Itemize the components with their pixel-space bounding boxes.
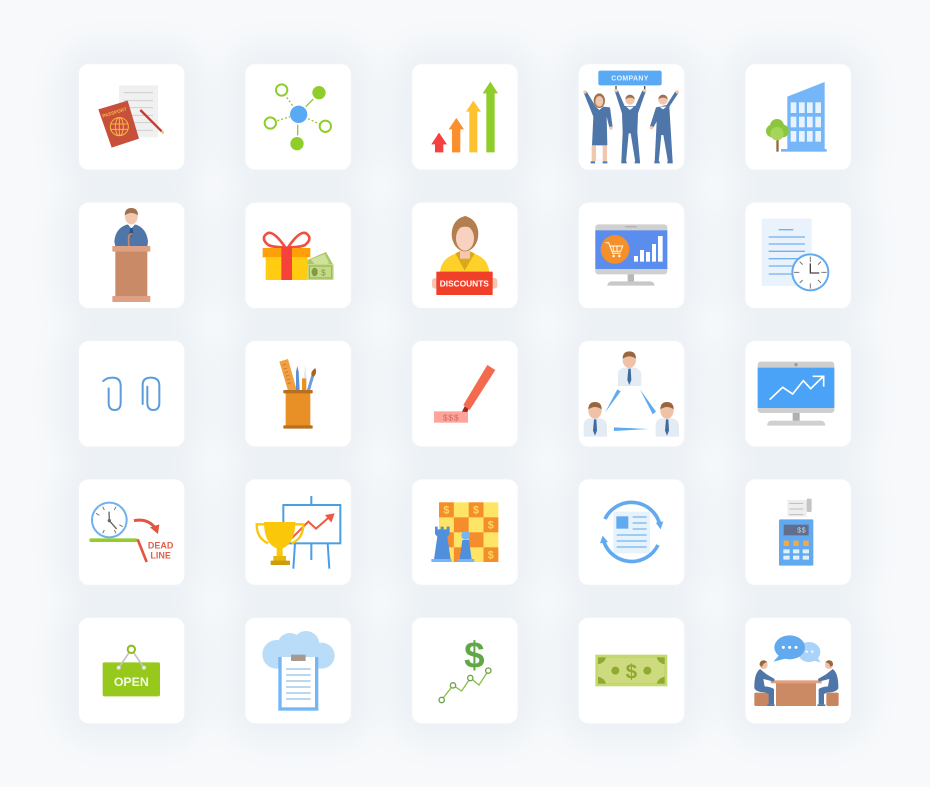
icon: document with clock	[762, 219, 828, 290]
white cards	[78, 64, 851, 724]
icon: open sign: OPEN	[114, 675, 149, 689]
icon: highlighter marker	[434, 365, 495, 423]
icon: paper clips	[103, 378, 159, 410]
icon: gift box with money	[263, 233, 334, 280]
icon: passport and document	[98, 85, 164, 148]
icon: passport and document: PASSPORT	[102, 106, 128, 119]
icon: speaker at podium	[112, 208, 150, 302]
icon: chess board with dollars: $	[488, 550, 494, 562]
icon: gift box with money: $	[321, 267, 326, 277]
icon: monitor with shopping cart	[595, 224, 667, 286]
icon: deadline clock: LINE	[150, 550, 171, 560]
icon: deadline clock	[89, 503, 174, 562]
icon: trophy and presentation board	[257, 496, 340, 569]
icon: cloud clipboard	[262, 631, 335, 711]
icon: dollar with trend line	[439, 634, 491, 703]
icon: monitor with growth chart	[758, 362, 834, 426]
icon: chess board with dollars	[431, 502, 498, 562]
icon: woman holding discounts sign: DISCOUNTS	[440, 278, 489, 288]
icon: office building and tree	[766, 82, 827, 152]
icon: dollar banknote	[595, 655, 667, 686]
icon: company team with banner	[583, 71, 679, 163]
icon: chess board with dollars: $	[473, 505, 479, 517]
icon: rising arrows	[431, 82, 498, 152]
icon: deadline clock: DEAD	[148, 540, 174, 550]
icon: business meeting with speech bubbles	[754, 635, 839, 706]
icon: chess board with dollars: $	[488, 520, 494, 532]
icon: team triangle	[584, 351, 679, 437]
icon: chess board with dollars: $	[443, 505, 449, 517]
icon: dollar banknote: $	[626, 660, 638, 683]
icon: open sign	[103, 646, 160, 696]
icon: network nodes	[265, 84, 331, 150]
icon: highlighter marker: $$$	[443, 412, 459, 422]
icon: document refresh cycle	[600, 502, 663, 561]
icon: company team with banner: COMPANY	[611, 75, 649, 82]
icon: dollar with trend line: $	[464, 634, 485, 675]
icon: payment calculator with receipt: $$	[797, 526, 806, 535]
icon: payment calculator with receipt	[779, 499, 813, 566]
icon: pencil cup	[279, 359, 316, 429]
icon: woman holding discounts sign	[432, 216, 497, 295]
